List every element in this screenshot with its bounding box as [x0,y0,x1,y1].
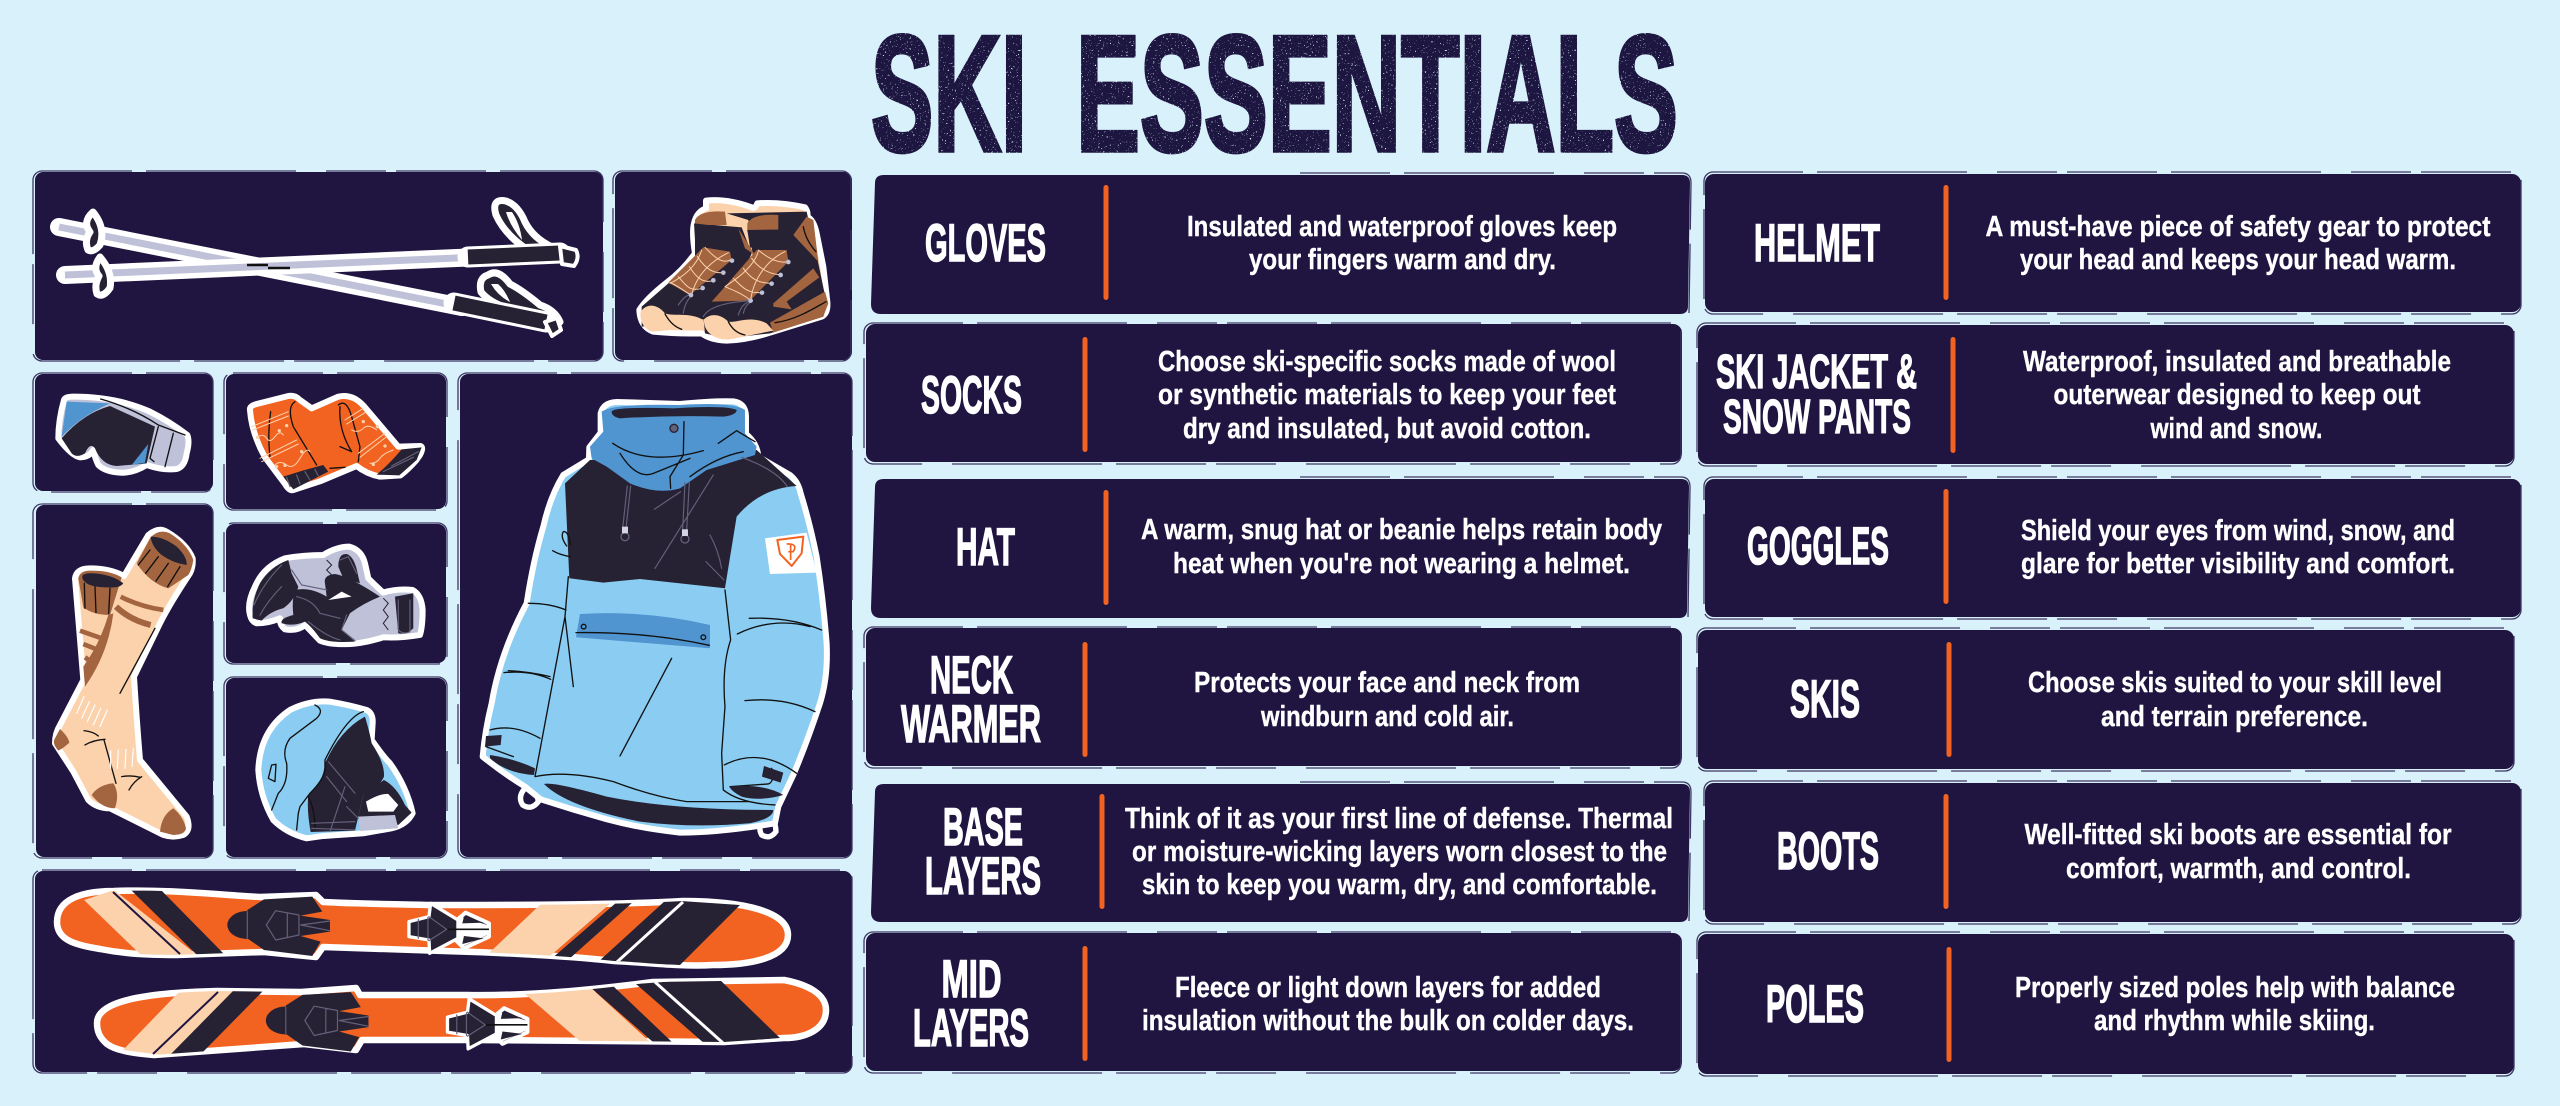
heading [901,646,1041,754]
heading [925,798,1041,906]
icon: top ski [57,890,788,965]
heading: SKI JACKET & [1716,346,1917,399]
description: A warm, snug hat or beanie helps retain body [1141,514,1662,546]
card: base layers [871,782,1691,922]
divider [1946,642,1952,757]
panel: gloves illustration [224,523,447,664]
description [2028,667,2442,733]
panel: skis illustration [33,870,852,1073]
description: Shield your eyes from wind, snow, and [2021,515,2455,547]
card: boots [1704,781,2521,924]
description: wind and snow. [2150,413,2322,445]
title: SKI [871,2,1027,186]
description [1187,211,1617,276]
description: glare for better visibility and comfort. [2021,548,2455,580]
description: and terrain preference. [2101,701,2368,733]
heading: LAYERS [925,847,1041,906]
panel: neck warmer illustration [224,373,447,510]
heading: SOCKS [921,366,1022,425]
divider [1104,490,1108,605]
description [2021,515,2455,580]
heading: BOOTS [1777,822,1879,881]
description: Fleece or light down layers for added [1175,972,1601,1004]
divider [1946,947,1952,1062]
divider [1950,337,1956,453]
card: ski jacket and snow pants [1697,323,2514,466]
description [1986,211,2491,276]
icon: socks [54,530,193,837]
icon: ski jacket [483,401,827,837]
heading [913,950,1029,1058]
description [1158,346,1616,445]
divider [1100,794,1104,909]
card: neck warmer [864,627,1682,768]
description [1194,667,1580,733]
panel: boots illustration [613,171,852,361]
icon: boots [639,200,828,341]
panel: jacket illustration [458,373,852,858]
description: or synthetic materials to keep your feet [1158,379,1616,411]
icon: helmet [258,701,413,838]
heading: WARMER [901,695,1041,754]
description: heat when you're not wearing a helmet. [1173,548,1630,580]
icon: neck warmer [250,396,422,490]
divider [1082,946,1088,1061]
card: hat [871,477,1690,618]
description: Think of it as your first line of defense. Thermal [1125,803,1673,835]
card: skis [1697,628,2514,771]
icon: bottom ski [97,978,826,1056]
description: dry and insulated, but avoid cotton. [1183,413,1591,445]
panel: socks illustration [33,504,213,858]
description [2015,972,2455,1037]
heading: SNOW PANTS [1723,391,1911,444]
card: mid layers [864,932,1682,1073]
heading: GOGGLES [1747,517,1889,576]
description: Well-fitted ski boots are essential for [2024,819,2452,851]
description: your fingers warm and dry. [1249,244,1556,276]
heading: HELMET [1754,214,1880,273]
description: windburn and cold air. [1260,701,1514,733]
divider [1944,794,1948,909]
divider [1082,337,1088,452]
description: or moisture-wicking layers worn closest to the [1132,836,1667,868]
divider [1082,642,1088,757]
icon: poles [59,201,578,336]
heading: POLES [1766,975,1864,1034]
description: and rhythm while skiing. [2094,1005,2375,1037]
heading: LAYERS [913,999,1029,1058]
divider [1104,185,1108,300]
description: Properly sized poles help with balance [2015,972,2455,1004]
divider [1944,489,1948,604]
description [1141,514,1662,580]
card: poles [1697,932,2514,1076]
description [2024,819,2452,885]
icon: goggles [58,397,189,473]
divider [1944,185,1948,300]
description: Choose ski-specific socks made of wool [1158,346,1616,378]
heading: GLOVES [925,214,1046,273]
description: Waterproof, insulated and breathable [2023,346,2451,378]
heading: SKIS [1790,670,1860,729]
heading: BASE [943,798,1023,857]
description: comfort, warmth, and control. [2066,853,2411,885]
icon: gloves [249,547,423,644]
description [2023,346,2451,445]
card: gloves [871,173,1691,314]
description: Insulated and waterproof gloves keep [1187,211,1617,243]
description: your head and keeps your head warm. [2020,244,2456,276]
description: skin to keep you warm, dry, and comfortable. [1142,869,1657,901]
card: goggles [1704,477,2521,619]
heading: MID [942,950,1002,1009]
card: socks [864,323,1682,464]
description [1125,803,1673,901]
heading [1716,346,1917,444]
heading: HAT [956,518,1015,577]
panel: ski poles illustration [33,171,603,361]
panel: helmet illustration [224,677,447,858]
heading: NECK [930,646,1013,705]
title [871,2,1678,186]
description: outerwear designed to keep out [2054,379,2421,411]
panel: goggles illustration [33,373,213,492]
title: ESSENTIALS [1076,2,1678,186]
description: Choose skis suited to your skill level [2028,667,2442,699]
description: Protects your face and neck from [1194,667,1580,699]
description: insulation without the bulk on colder days. [1142,1005,1634,1037]
description [1142,972,1634,1037]
card: helmet [1704,172,2521,314]
